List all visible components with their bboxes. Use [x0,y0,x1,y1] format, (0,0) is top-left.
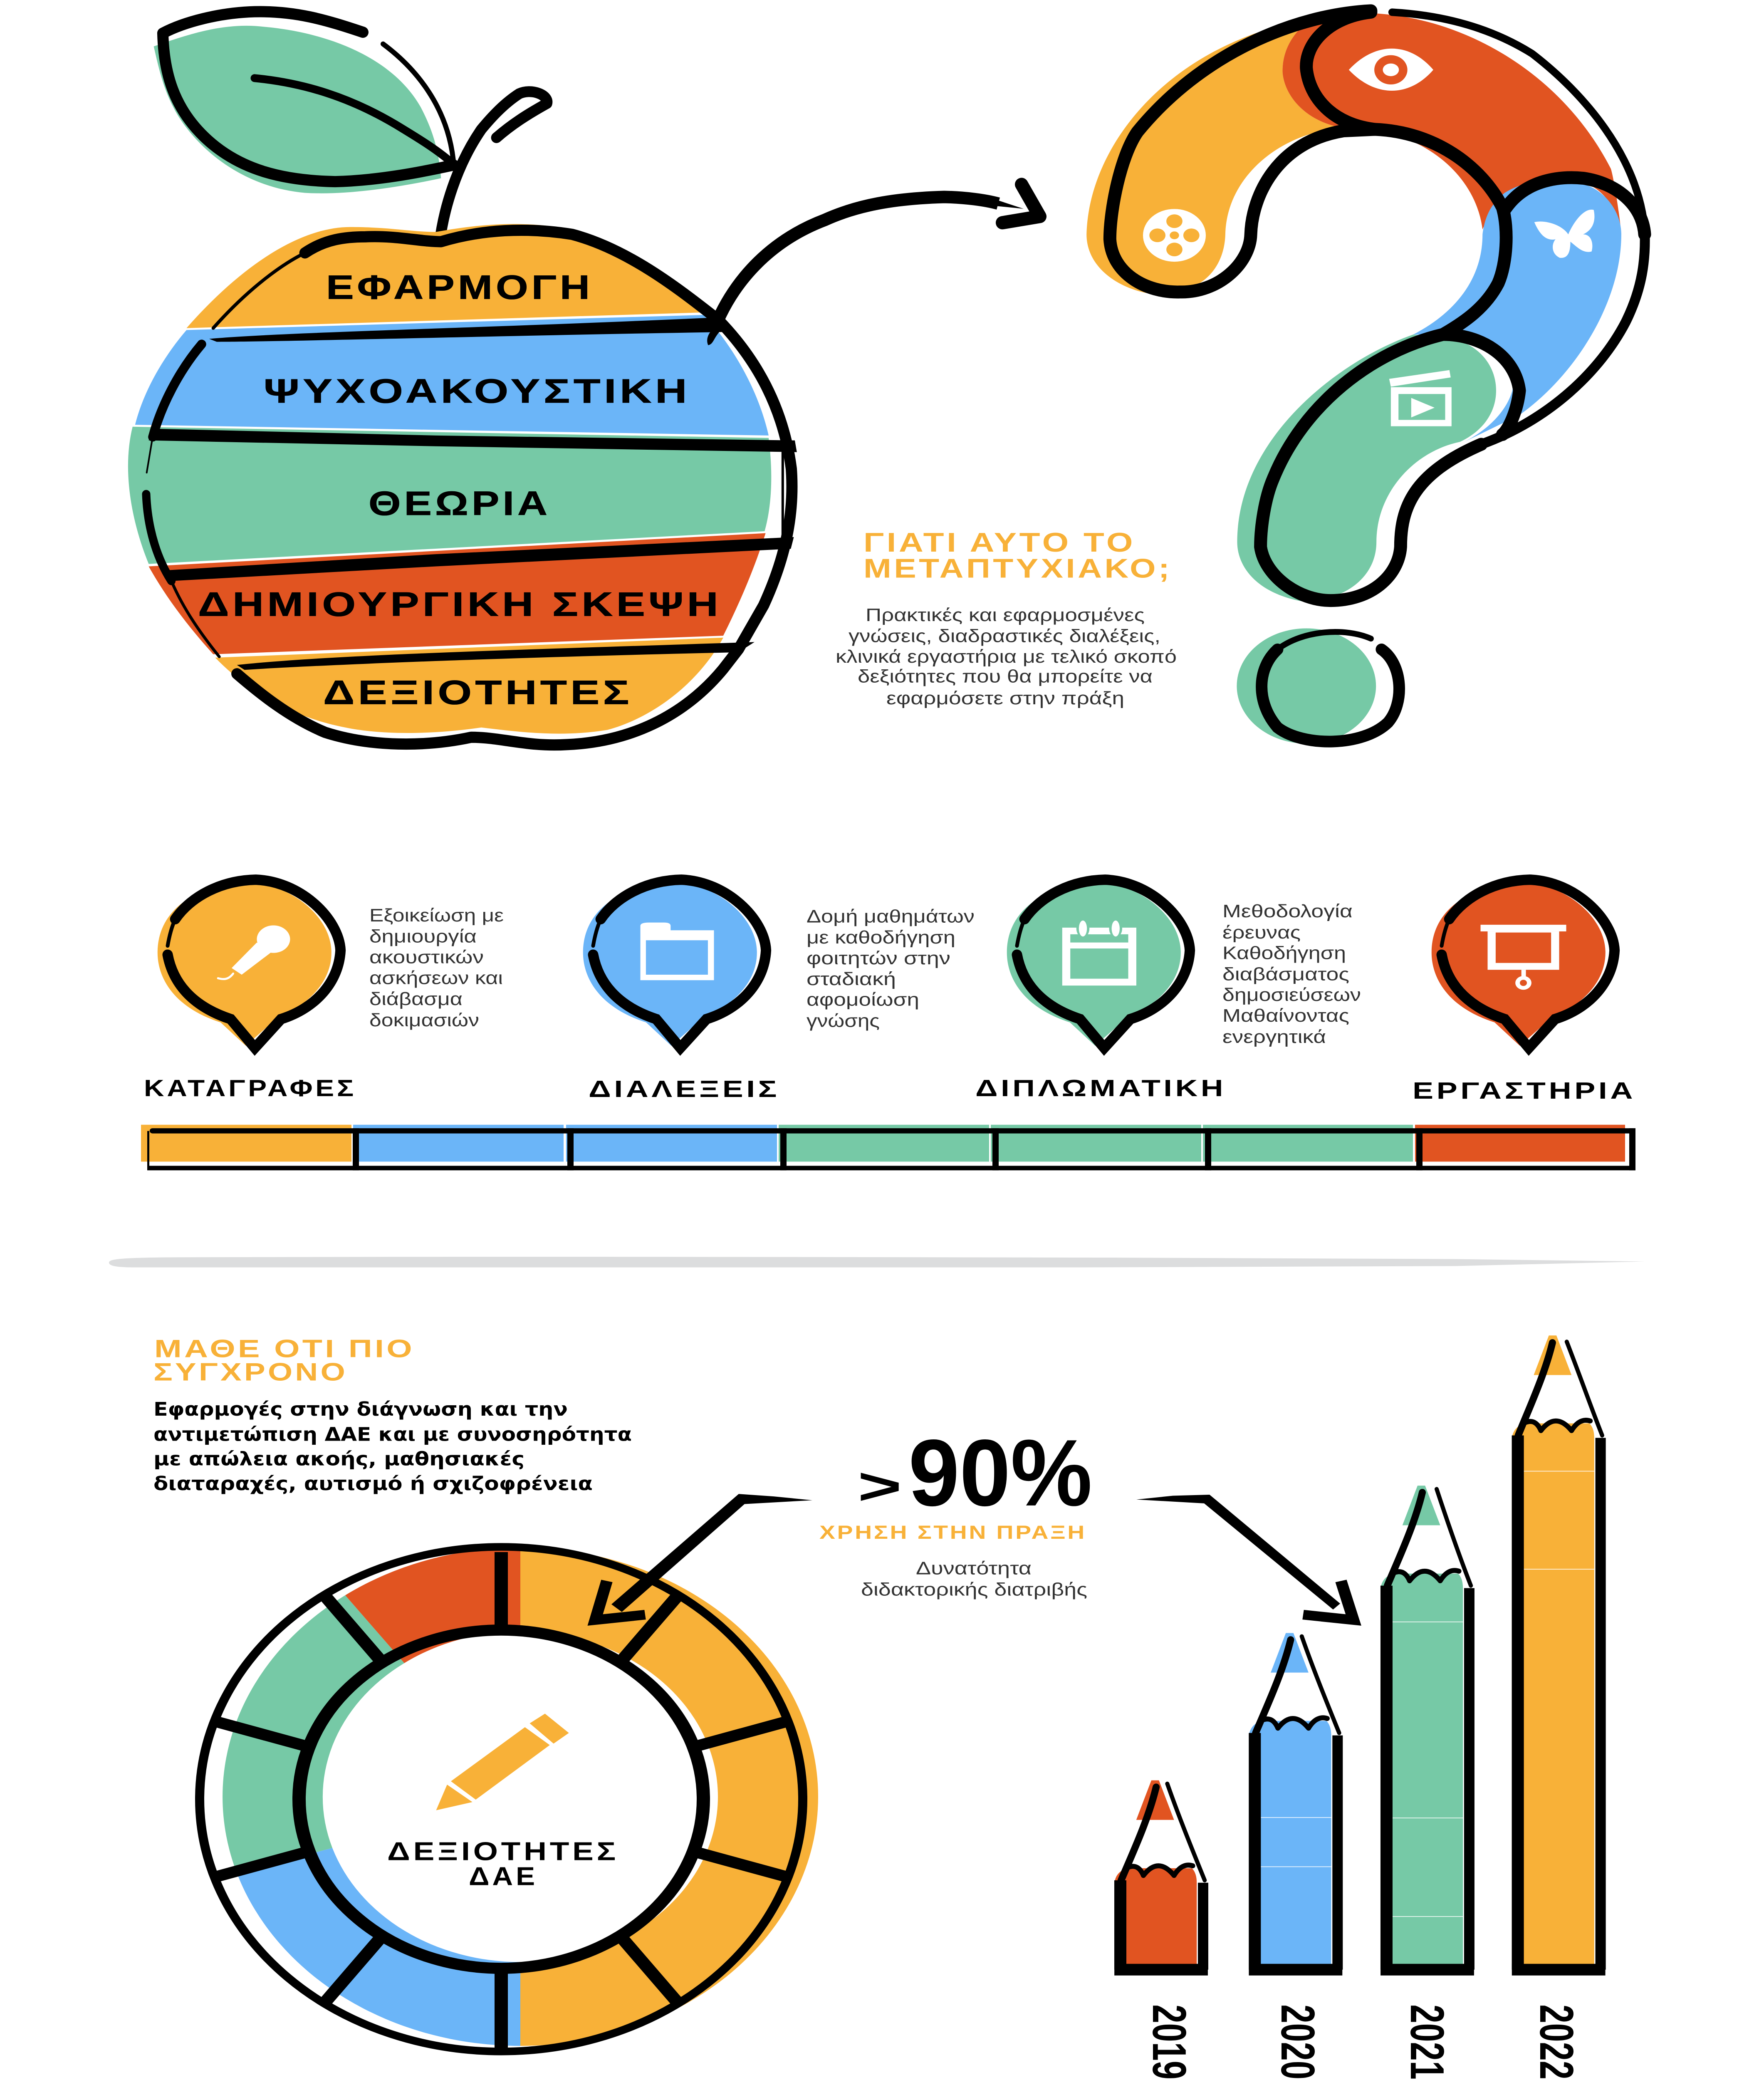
text block: applications: αντιμετώπιση ΔΑΕ και με συνοσηρότητα [153,1424,632,1445]
segment: blue [1413,180,1621,442]
stat: >90% [858,1420,1092,1526]
text block: ΚΑΤΑΓΡΑΦΕΣ description [369,906,504,1030]
text block: ΚΑΤΑΓΡΑΦΕΣ description: ασκήσεων και [369,968,503,988]
arrow: apple to question mark [717,184,1040,322]
text block: applications [153,1398,632,1495]
text block: ΔΙΠΛΩΜΑΤΙΚΗ description [1222,901,1361,1047]
text block: ΚΑΤΑΓΡΑΦΕΣ description: Εξοικείωση με [369,906,504,926]
text block: doctoral thesis: Δυνατότητα [916,1558,1032,1578]
heading: why this programme [863,527,1172,584]
text block: ΔΙΠΛΩΜΑΤΙΚΗ description: έρευνας [1222,923,1301,943]
text block: ΔΙΠΛΩΜΑΤΙΚΗ description: διαβάσματος [1222,964,1349,985]
icon: folder [641,923,714,980]
apple outline [146,230,797,745]
segment: green [223,1595,404,1874]
heading: why this programme: ΓΙΑΤΙ ΑΥΤΟ ΤΟ [863,527,1136,557]
icon: butterfly [1534,210,1594,258]
heading: learn the latest: ΜΑΘΕ ΟΤΙ ΠΙΟ [154,1335,415,1363]
segment: orange [1086,19,1343,293]
text block: ΔΙΠΛΩΜΑΤΙΚΗ description: Μαθαίνοντας [1222,1006,1349,1026]
text block: programme description: Πρακτικές και εφαρμοσμένες [866,605,1145,625]
bar chart: pencils [1114,1335,1606,1970]
text block: applications: με απώλεια ακοής, μαθησιακές [153,1448,524,1470]
icon: eye [1349,49,1433,91]
pin: ΚΑΤΑΓΡΑΦΕΣ [158,880,341,1048]
pin: ΔΙΑΛΕΞΕΙΣ [583,880,766,1048]
segment: orange [520,1548,818,2046]
heading: learn the latest [153,1335,415,1386]
text block: applications: Εφαρμογές στην διάγνωση και την [153,1398,568,1420]
icon: pencil [436,1714,569,1810]
pencil bar: 2022 [1512,1335,1606,1970]
label: ΚΑΤΑΓΡΑΦΕΣ: ΚΑΤΑΓΡΑΦΕΣ [144,1075,356,1102]
donut chart: skills [200,1547,818,2051]
band: ΔΗΜΙΟΥΡΓΙΚΗ ΣΚΕΨΗ [149,533,766,654]
pencil bar: 2019 [1114,1780,1208,1970]
panel: apple [128,12,797,745]
icon: calendar [1062,920,1136,986]
icon: video clapper [1389,370,1452,426]
band: ΔΗΜΙΟΥΡΓΙΚΗ ΣΚΕΨΗ: ΔΗΜΙΟΥΡΓΙΚΗ ΣΚΕΨΗ [198,585,722,624]
stat caption: ΧΡΗΣΗ ΣΤΗΝ ΠΡΑΞΗ [819,1522,1086,1543]
timeline bar [141,1125,1635,1170]
donut label [387,1837,619,1891]
text block: ΔΙΑΛΕΞΕΙΣ description [807,907,975,1031]
axis label: 2022: 2022 [1530,2004,1583,2080]
text block: ΚΑΤΑΓΡΑΦΕΣ description: δημιουργία [369,926,477,946]
band: ΘΕΩΡΙΑ [128,427,771,564]
axis label: 2019: 2019 [1143,2004,1196,2080]
donut label: ΔΑΕ [469,1862,538,1891]
heading: learn the latest: ΣΥΓΧΡΟΝΟ [153,1358,348,1386]
band: ΨΥΧΟΑΚΟΥΣΤΙΚΗ [135,315,769,436]
segment: blue [237,1848,520,2046]
band: ΨΥΧΟΑΚΟΥΣΤΙΚΗ: ΨΥΧΟΑΚΟΥΣΤΙΚΗ [264,372,690,410]
text block: ΔΙΠΛΩΜΑΤΙΚΗ description: Καθοδήγηση [1222,943,1346,963]
stat: >90%: > [858,1457,902,1515]
donut label: ΔΕΞΙΟΤΗΤΕΣ [387,1837,619,1866]
text block: ΔΙΑΛΕΞΕΙΣ description: αφομοίωση [807,990,919,1010]
arrow: to donut [595,1494,812,1620]
segment: green [1237,334,1496,602]
text block: ΔΙΑΛΕΞΕΙΣ description: φοιτητών στην [807,948,950,968]
text block: programme description: γνώσεις, διαδραστικές διαλέξεις, [849,626,1160,646]
label: ΔΙΠΛΩΜΑΤΙΚΗ: ΔΙΠΛΩΜΑΤΙΚΗ [975,1075,1226,1102]
pin: ΕΡΓΑΣΤΗΡΙΑ [1432,880,1615,1048]
segment: red [1283,13,1621,234]
text block: ΔΙΠΛΩΜΑΤΙΚΗ description: ενεργητικά [1222,1027,1326,1047]
stat: >90%: 90% [908,1420,1092,1526]
icon: microphone [218,926,290,979]
text block: programme description [836,605,1177,708]
band: ΔΕΞΙΟΤΗΤΕΣ [215,638,723,734]
pencil bar: 2020 [1249,1633,1342,1970]
pencil bar: 2021 [1381,1486,1474,1970]
label: ΔΙΑΛΕΞΕΙΣ: ΔΙΑΛΕΞΕΙΣ [589,1076,780,1102]
text block: programme description: δεξιότητες που θα μπορείτε να [858,666,1153,686]
band: ΘΕΩΡΙΑ: ΘΕΩΡΙΑ [369,485,551,522]
text block: doctoral thesis: διδακτορικής διατριβής [861,1580,1087,1600]
apple stem [440,92,547,243]
donut outline [200,1547,803,2051]
icon: film reel [1143,209,1206,262]
label: ΕΡΓΑΣΤΗΡΙΑ: ΕΡΓΑΣΤΗΡΙΑ [1413,1077,1636,1104]
pin: ΔΙΠΛΩΜΑΤΙΚΗ [1007,880,1190,1048]
panel: question mark [1086,11,1645,743]
text block: programme description: κλινικά εργαστήρια με τελικό σκοπό [836,647,1177,667]
text block: ΔΙΑΛΕΞΕΙΣ description: Δομή μαθημάτων [807,907,975,927]
apple leaf [154,12,454,193]
text block: ΚΑΤΑΓΡΑΦΕΣ description: δοκιμασιών [369,1010,479,1030]
axis label: 2020: 2020 [1272,2004,1325,2080]
text block: programme description: εφαρμόσετε στην πράξη [886,688,1124,708]
arrow: to pencils [1136,1495,1353,1620]
text block: applications: διαταραχές, αυτισμό ή σχιζοφρένεια [153,1473,593,1495]
icon: projector screen [1481,925,1566,990]
axis label: 2021: 2021 [1401,2004,1454,2080]
text block: ΚΑΤΑΓΡΑΦΕΣ description: διάβασμα [369,989,463,1009]
segment: red [345,1548,520,1663]
heading: why this programme: ΜΕΤΑΠΤΥΧΙΑΚΟ; [863,554,1172,584]
text block: ΔΙΑΛΕΞΕΙΣ description: γνώσης [807,1011,880,1031]
text block: ΔΙΑΛΕΞΕΙΣ description: με καθοδήγηση [807,928,955,948]
band: ΕΦΑΡΜΟΓΗ [186,224,702,328]
question mark outline [1110,11,1645,601]
text block: ΔΙΠΛΩΜΑΤΙΚΗ description: Μεθοδολογία [1222,901,1353,921]
text block: ΔΙΑΛΕΞΕΙΣ description: σταδιακή [807,969,896,989]
band: ΕΦΑΡΜΟΓΗ: ΕΦΑΡΜΟΓΗ [326,268,593,307]
text block: ΔΙΠΛΩΜΑΤΙΚΗ description: δημοσιεύσεων [1222,985,1361,1005]
band: ΔΕΞΙΟΤΗΤΕΣ: ΔΕΞΙΟΤΗΤΕΣ [323,674,633,711]
question mark dot [1237,629,1399,743]
text block: doctoral thesis [861,1558,1087,1600]
text block: ΚΑΤΑΓΡΑΦΕΣ description: ακουστικών [369,947,484,968]
